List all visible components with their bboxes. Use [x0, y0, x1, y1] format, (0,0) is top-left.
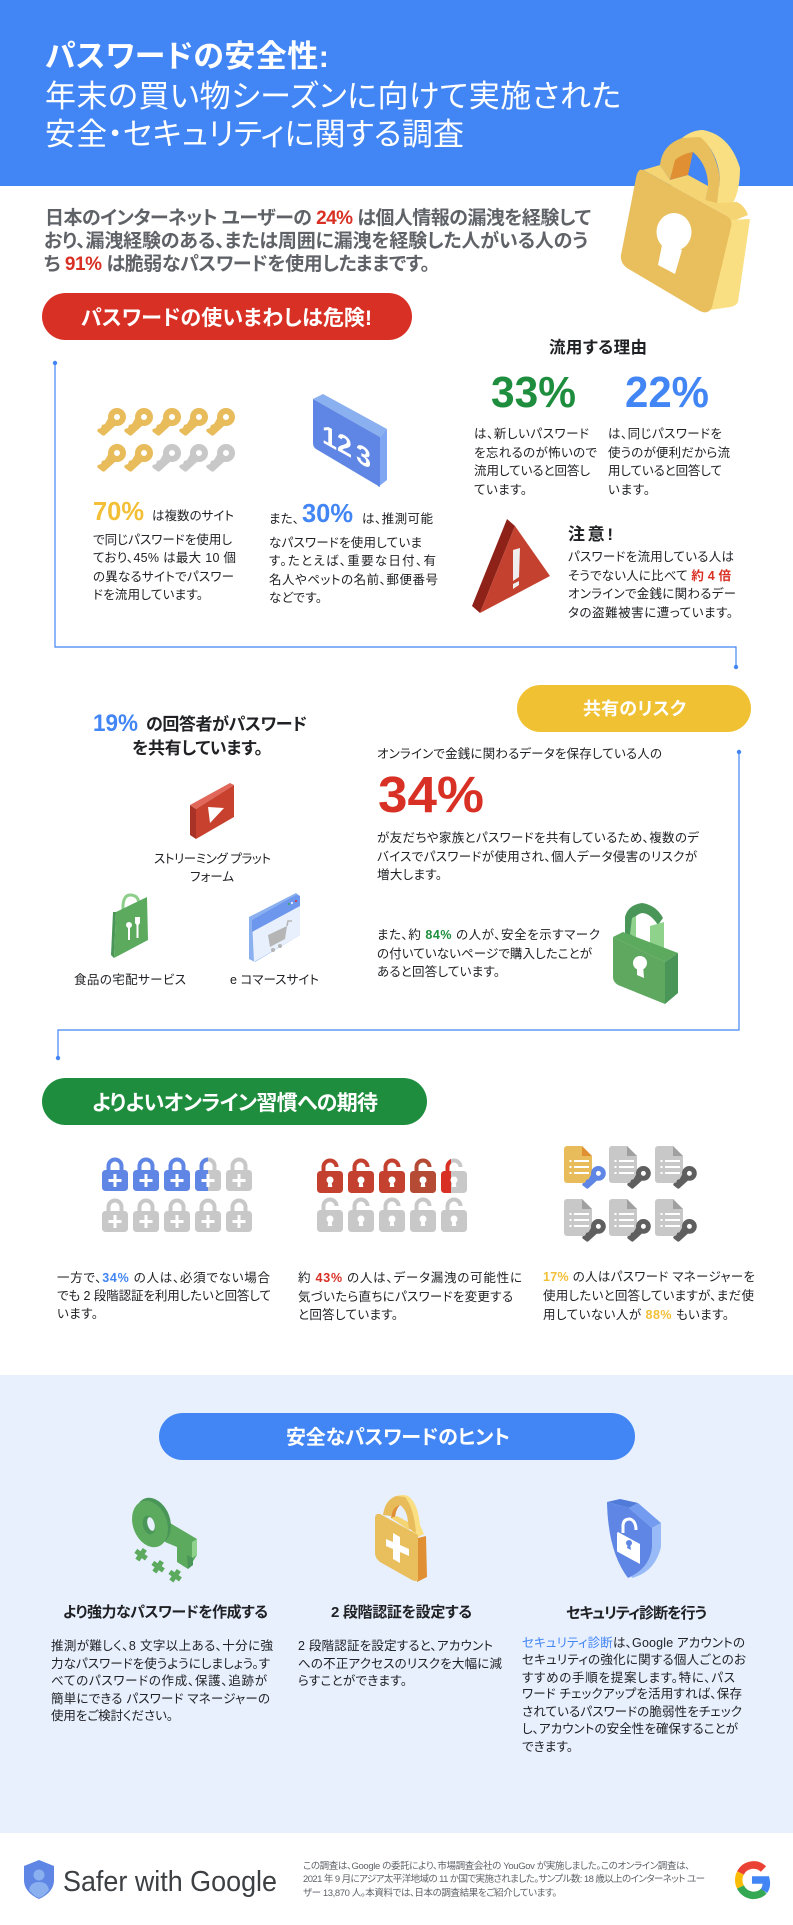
stat text: 30 percent: す。たとえば、重要な日付、有: [269, 553, 436, 568]
intro paragraph: 日本のインターネット ユーザーの 24% は個人情報の漏洩を経験して: [45, 207, 591, 229]
stat text: 70 percent: の異なるサイトでパスワー: [93, 570, 234, 584]
tip text: strong password: 力なパスワードを使うようにしましょう。す: [51, 1656, 270, 1671]
stat text: 30 percent: [269, 498, 438, 605]
heading pill: better habits: よりよいオンライン習慣への期待: [92, 1092, 378, 1115]
callout: caution: パスワードを流用している人は: [568, 550, 734, 564]
callout: caution: オンラインで金銭に関わるデー: [568, 586, 736, 601]
stat: 33 percent: を忘れるのが怖いので: [474, 445, 597, 460]
stat: 34 percent sharing risk: オンラインで金銭に関わるデータを保存している人の: [377, 746, 662, 761]
icon: green padlock: [613, 903, 678, 1004]
footer note: ザー 13,870 人。本資料では、日本の調査結果をご紹介しています。: [303, 1887, 557, 1899]
header band: [0, 0, 793, 186]
stat text: 30 percent: などです。: [269, 591, 322, 605]
icon grid: red open locks 43 percent: [317, 1160, 467, 1232]
text: 43 percent change: 気づいたら直ちにパスワードを変更する: [298, 1289, 513, 1304]
panel: password tips background: [0, 1375, 793, 1833]
icon: strong green key: [126, 1493, 197, 1585]
tip text: security checkup: セキュリティ診断を行う: [566, 1605, 707, 1622]
label: food delivery: 食品の宅配サービス: [74, 973, 186, 987]
label: streaming platform: [154, 852, 271, 884]
stat: 34 percent sharing risk: バイスでパスワードが使用され、個人データ侵害のリスクが: [377, 849, 698, 864]
intro paragraph: おり、漏洩経験のある、または周囲に漏洩を経験した人がいる人のう: [44, 229, 588, 252]
heading pill: reuse danger: [42, 293, 412, 340]
icon: warning triangle: [472, 519, 550, 613]
tip text: security checkup: [522, 1605, 746, 1754]
callout: caution: タの盗難被害に遭っています。: [568, 605, 733, 620]
stat: 34 percent sharing risk: [377, 746, 700, 882]
stat: 22 percent: 22%: [625, 368, 709, 417]
stat text: 70 percent: で同じパスワードを使用し: [93, 532, 232, 547]
icon: streaming platform: [190, 783, 234, 839]
text: 84 percent: の付いていないページで購入したことが: [377, 946, 593, 961]
callout: caution: そうでない人に比べて 約 4 倍: [568, 568, 731, 583]
stat text: 70 percent: [93, 496, 236, 602]
heading: 19 percent share: を共有しています。: [132, 739, 263, 758]
heading pill: sharing risk: 共有のリスク: [583, 699, 686, 719]
tip text: security checkup: できます。: [522, 1740, 573, 1754]
stat text: 30 percent: 30%: [302, 498, 353, 528]
stat text: 30 percent: なパスワードを使用していま: [269, 535, 422, 550]
text: 84 percent: また、約 84% の人が、安全を示すマーク: [377, 927, 600, 942]
tip text: security checkup: ワード チェックアップを活用すれば、保存: [522, 1687, 742, 1701]
icon: keys 70 percent: [97, 408, 235, 472]
tip text: security checkup: し、アカウントの安全性を確保することが: [522, 1721, 739, 1736]
tip text: strong password: 簡単にできる パスワード マネージャーの: [51, 1691, 270, 1706]
text: 84 percent: あると回答しています。: [377, 964, 500, 979]
tip text: strong password: より強力なパスワードを作成する: [63, 1603, 268, 1621]
icon: 123 block: 2: [337, 427, 352, 465]
stat text: 30 percent: は、推測可能: [362, 511, 433, 526]
heading pill: tips: 安全なパスワードのヒント: [286, 1426, 510, 1449]
tip text: two step: への不正アクセスのリスクを大幅に減: [298, 1656, 502, 1671]
icon: 123 block: 3: [356, 438, 371, 476]
tip text: security checkup: セキュリティの強化に関する個人ごとのお: [522, 1652, 746, 1667]
stat: 33 percent: [474, 368, 597, 497]
stat: 33 percent: 流用していると回答し: [474, 463, 590, 478]
stat: 33 percent: 33%: [491, 368, 576, 417]
title: 安全・セキュリティに関する調査: [45, 117, 464, 152]
label: streaming platform: フォーム: [190, 870, 234, 884]
title: パスワードの安全性:: [45, 39, 329, 74]
text: 43 percent change: と回答しています。: [298, 1307, 398, 1322]
tip text: two step: 2 段階認証を設定すると、アカウント: [298, 1638, 493, 1653]
stat text: 70 percent: ドを流用しています。: [93, 588, 203, 602]
connector line 1: [53, 361, 738, 669]
stat: 34 percent sharing risk: が友だちや家族とパスワードを共有しているため、複数のデ: [377, 830, 700, 845]
icon: yellow plus padlock: [375, 1495, 427, 1582]
tip text: strong password: 推測が難しく、8 文字以上ある、十分に強: [51, 1638, 273, 1653]
text: 17 percent manager: [543, 1270, 755, 1322]
stat: 34 percent sharing risk: 34%: [378, 766, 484, 823]
footer logo: Safer with Google: [24, 1860, 277, 1899]
stat: 34 percent sharing risk: 増大します。: [377, 868, 442, 882]
stat text: 70 percent: は複数のサイト: [152, 508, 234, 523]
icon: security shield: [607, 1499, 661, 1578]
text: 17 percent manager: 使用したいと回答していますが、まだ使: [543, 1288, 754, 1303]
stat: 22 percent: [608, 368, 730, 497]
icon: food delivery bag: [111, 895, 148, 958]
tip text: two step: らすことができます。: [298, 1673, 407, 1688]
text: 34 percent two step: [57, 1270, 271, 1321]
callout: caution: [568, 525, 736, 620]
icon: 123 block: [313, 394, 387, 487]
title: 年末の買い物シーズンに向けて実施された: [45, 79, 621, 114]
heading: 19 percent share: [93, 710, 307, 758]
intro paragraph: [44, 207, 591, 275]
icon: 123 block: 1: [322, 419, 337, 457]
text: 43 percent change: 約 43% の人は、データ漏洩の可能性に: [298, 1270, 522, 1285]
tip text: security checkup: セキュリティ診断は、Google アカウントの: [522, 1635, 745, 1650]
stat: 22 percent: います。: [608, 483, 650, 497]
title: [45, 39, 621, 152]
heading pill: reuse danger: パスワードの使いまわしは危険!: [81, 307, 372, 330]
label: e-commerce: e コマースサイト: [230, 973, 319, 987]
heading pill: tips: [159, 1413, 635, 1460]
heading pill: sharing risk: [517, 685, 751, 732]
heading: 19 percent share: 19%: [93, 710, 138, 737]
tip text: strong password: [51, 1603, 273, 1723]
stat: 22 percent: は、同じパスワードを: [608, 427, 722, 441]
stat text: 30 percent: 名人やペットの名前、郵便番号: [269, 572, 438, 587]
icon grid: password manager documents: [564, 1146, 697, 1242]
footer note: この調査は、Google の委託により、市場調査会社の YouGov が実施しました。このオンライン調査は、: [303, 1860, 690, 1872]
heading: 19 percent share: の回答者がパスワード: [146, 714, 307, 734]
tip text: two step: [298, 1603, 502, 1688]
connector line 2: [56, 750, 741, 1060]
tip text: strong password: べてのパスワードの作成、保護、追跡が: [51, 1673, 268, 1688]
text: 84 percent: [377, 927, 600, 979]
text: 34 percent two step: 一方で、34% の人は、必須でない場合: [57, 1270, 270, 1285]
tip text: security checkup: すすめの手順を提案します。特に、パス: [522, 1670, 735, 1685]
stat: 33 percent: は、新しいパスワード: [474, 427, 589, 441]
intro paragraph: ち 91% は脆弱なパスワードを使用したままです。: [44, 252, 430, 275]
icon: e-commerce browser: [249, 893, 300, 962]
icon: big yellow padlock: [621, 130, 750, 312]
text: 43 percent change: [298, 1270, 522, 1322]
text: 17 percent manager: 用していない人が 88% もいます。: [543, 1307, 729, 1322]
icon grid: blue plus locks 34 percent: [102, 1160, 252, 1232]
tip text: security checkup: されているパスワードの脆弱性をチェック: [522, 1704, 742, 1719]
stat text: 70 percent: 70%: [93, 496, 144, 526]
icon: Google G logo: [739, 1865, 766, 1895]
stat text: 30 percent: また、: [269, 512, 299, 526]
text: 34 percent two step: でも 2 段階認証を利用したいと回答して: [57, 1288, 271, 1303]
tip text: strong password: 使用をご検討ください。: [51, 1708, 173, 1723]
stat text: 70 percent: ており、45% は最大 10 個: [93, 551, 236, 565]
text: 17 percent manager: 17% の人はパスワード マネージャーを: [543, 1270, 755, 1284]
stat: 22 percent: 使うのが便利だから流: [608, 445, 730, 460]
heading: reasons: 流用する理由: [549, 338, 647, 357]
footer note: 2021 年 9 月にアジア太平洋地域の 11 か国で実施されました。サンプル数: 18 歳以上のインターネット ユー: [303, 1873, 705, 1885]
text: 34 percent two step: います。: [57, 1307, 98, 1321]
label: streaming platform: ストリーミング プラット: [154, 852, 271, 866]
footer note: [303, 1860, 705, 1899]
callout: caution: 注意!: [568, 525, 613, 544]
heading pill: better habits: [42, 1078, 427, 1125]
tip text: two step: 2 段階認証を設定する: [331, 1603, 472, 1621]
footer logo: Safer with Google: Safer with Google: [63, 1866, 277, 1898]
stat: 33 percent: ています。: [474, 483, 527, 497]
stat: 22 percent: 用していると回答して: [608, 463, 722, 478]
